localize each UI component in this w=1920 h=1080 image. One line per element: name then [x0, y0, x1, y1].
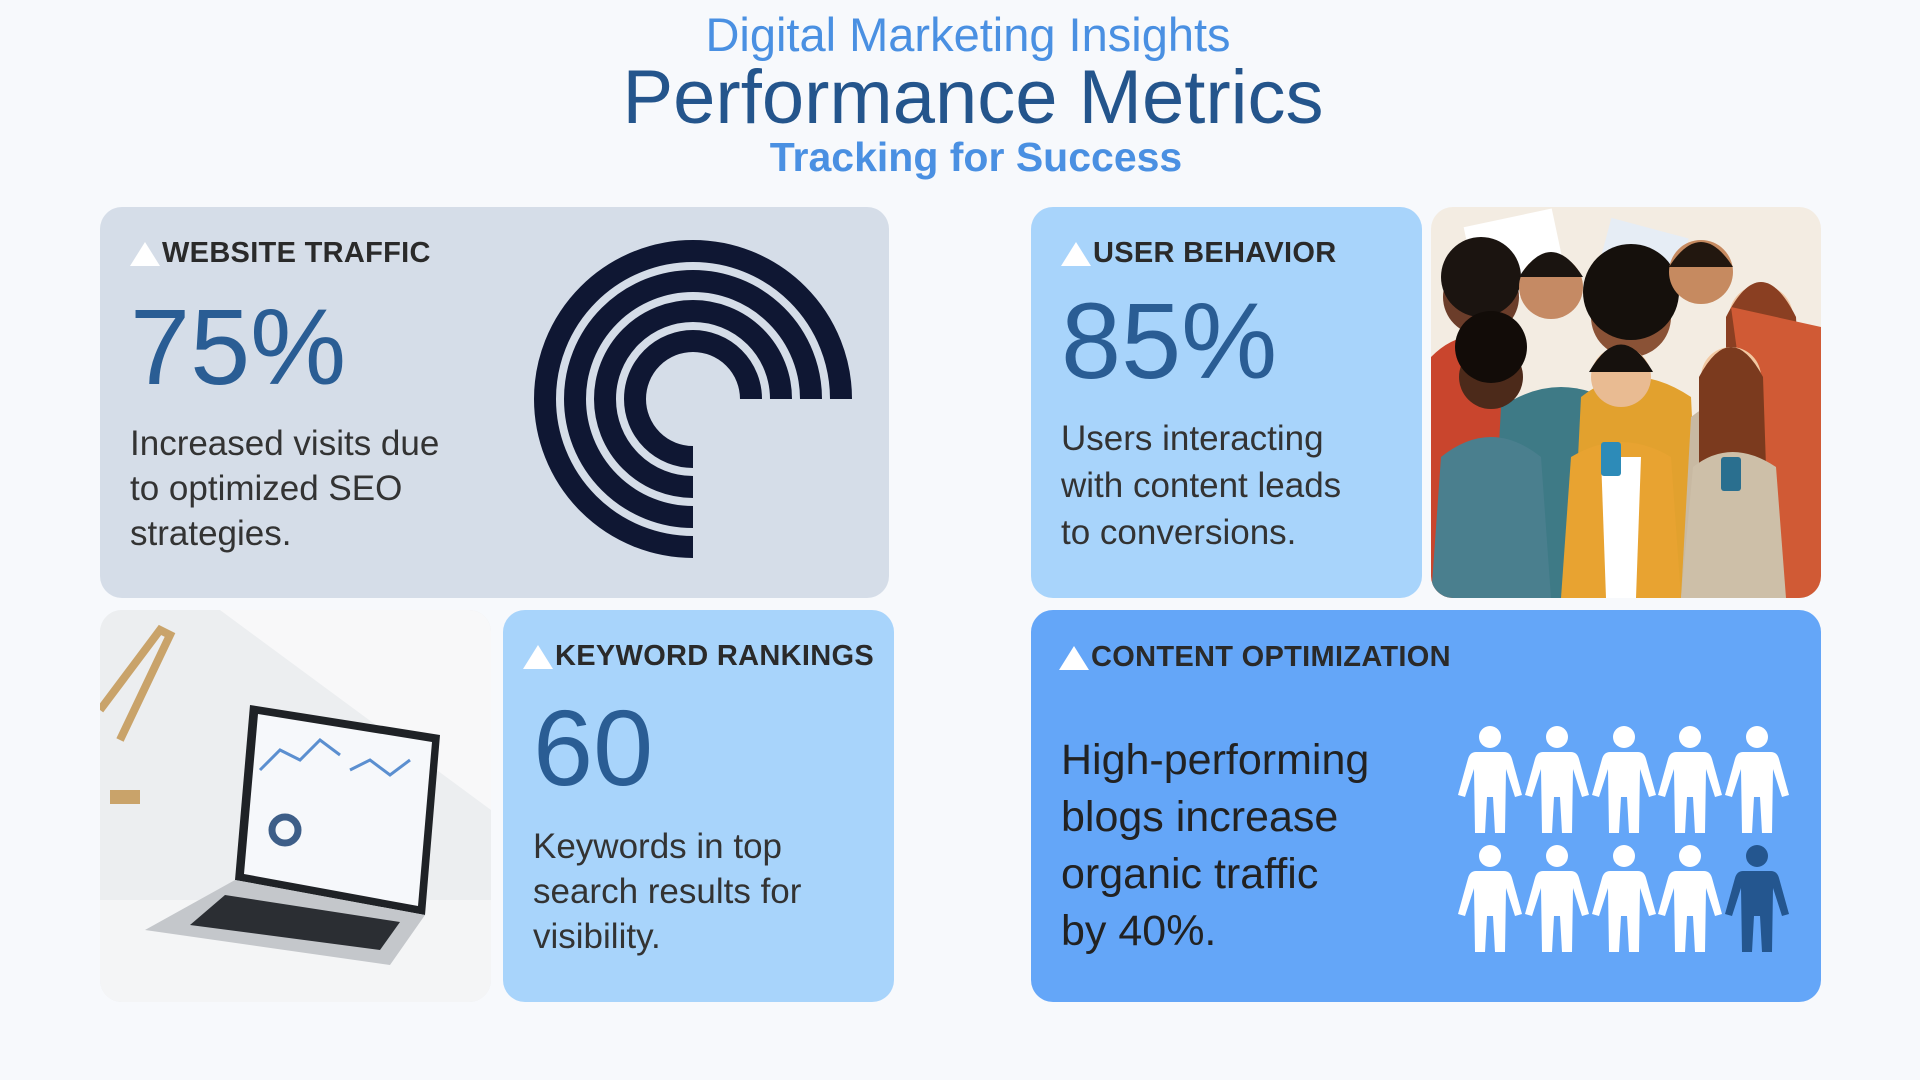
heading: USER BEHAVIOR: [1093, 237, 1336, 269]
heading: KEYWORD RANKINGS: [555, 640, 874, 672]
description: organic traffic: [1061, 850, 1318, 898]
title: Performance Metrics: [622, 55, 1324, 140]
icon: concentric arcs: [534, 240, 852, 558]
description: to optimized SEO: [130, 469, 402, 508]
description: Keywords in top: [533, 827, 782, 866]
description: [1061, 419, 1341, 552]
heading: WEBSITE TRAFFIC: [162, 237, 431, 269]
description: strategies.: [130, 514, 291, 553]
image: people with phones: [1431, 207, 1821, 598]
description: [533, 827, 801, 956]
panel: content optimization: [1031, 610, 1821, 1002]
panel: website traffic: [100, 207, 889, 598]
description: [1061, 736, 1369, 955]
panel: keyword rankings: [503, 610, 894, 1002]
description: High-performing: [1061, 736, 1369, 784]
description: search results for: [533, 872, 801, 911]
description: to conversions.: [1061, 513, 1296, 552]
big number: 75%: [130, 286, 346, 407]
heading: CONTENT OPTIMIZATION: [1091, 641, 1451, 673]
icon: people pictogram: [1458, 726, 1789, 952]
big number: 85%: [1061, 280, 1277, 401]
header: [622, 8, 1324, 180]
description: by 40%.: [1061, 907, 1216, 955]
description: blogs increase: [1061, 793, 1338, 841]
panel: user behavior: [1031, 207, 1422, 598]
image: laptop on desk: [100, 610, 491, 1002]
description: Users interacting: [1061, 419, 1324, 458]
kicker: Digital Marketing Insights: [705, 8, 1231, 61]
description: [130, 424, 439, 553]
description: with content leads: [1061, 466, 1341, 505]
subtitle: Tracking for Success: [770, 134, 1182, 180]
description: visibility.: [533, 917, 661, 956]
description: Increased visits due: [130, 424, 439, 463]
big number: 60: [533, 687, 653, 808]
